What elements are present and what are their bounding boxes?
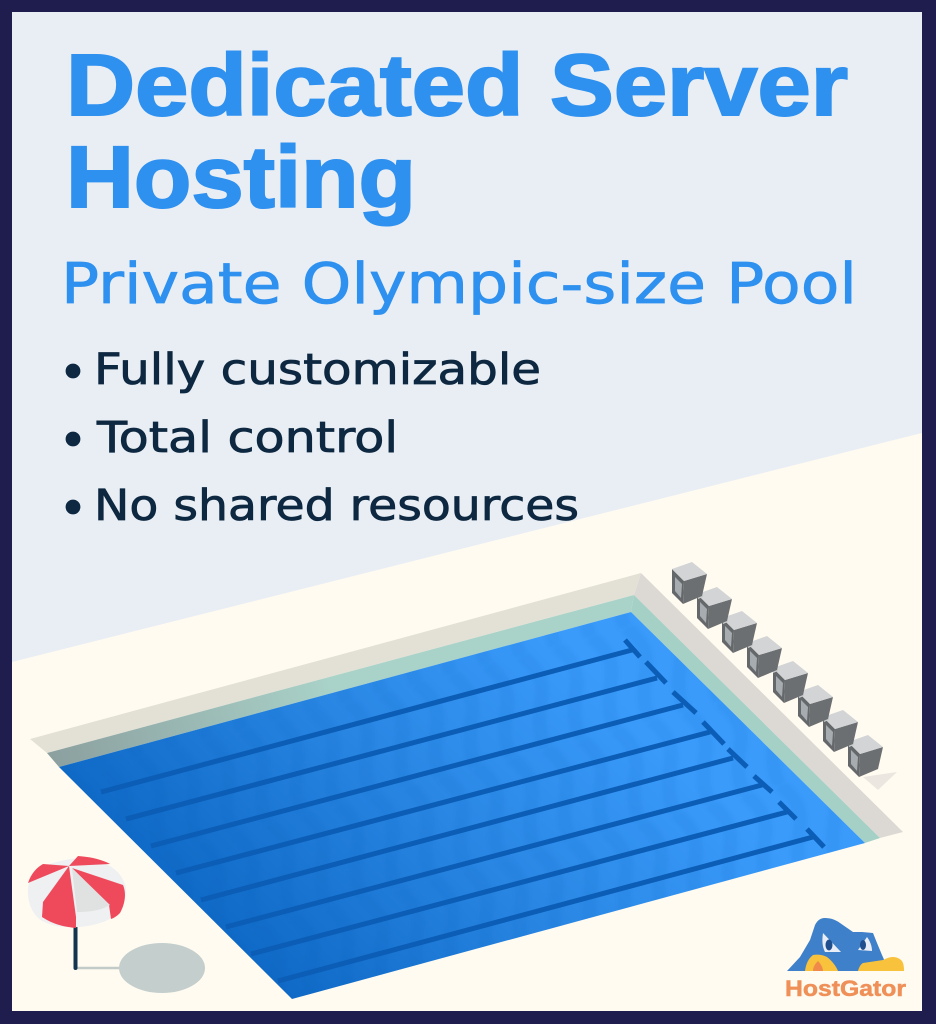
pool rim xyxy=(47,595,634,767)
bullet list xyxy=(66,345,579,531)
wordmark: HostGator xyxy=(785,976,906,1001)
title xyxy=(66,37,848,226)
bullet list: Fully customizable xyxy=(94,345,541,395)
starting blocks xyxy=(672,562,897,790)
umbrella canopy xyxy=(28,859,126,927)
icon: beach umbrella xyxy=(28,856,205,993)
gator eyes xyxy=(822,933,841,952)
title: Dedicated Server xyxy=(66,37,848,134)
water ripples xyxy=(40,600,880,1010)
gator head xyxy=(787,918,886,971)
subtitle: Private Olympic-size Pool xyxy=(61,252,857,317)
umbrella shadow xyxy=(75,967,125,969)
block shadow xyxy=(863,772,897,790)
lane lines xyxy=(101,640,824,981)
bullet list: Total control xyxy=(96,413,398,463)
pool deck: right edge xyxy=(634,573,903,838)
pool deck: top edge xyxy=(30,573,641,753)
bullet list: No shared resources xyxy=(94,481,579,531)
water xyxy=(59,612,865,999)
logo: HostGator xyxy=(785,918,906,1001)
panel: pool deck background xyxy=(12,433,922,1011)
gator hands xyxy=(805,955,838,971)
swimming pool xyxy=(30,573,903,1010)
umbrella pole xyxy=(74,925,78,968)
title: Hosting xyxy=(66,129,416,226)
